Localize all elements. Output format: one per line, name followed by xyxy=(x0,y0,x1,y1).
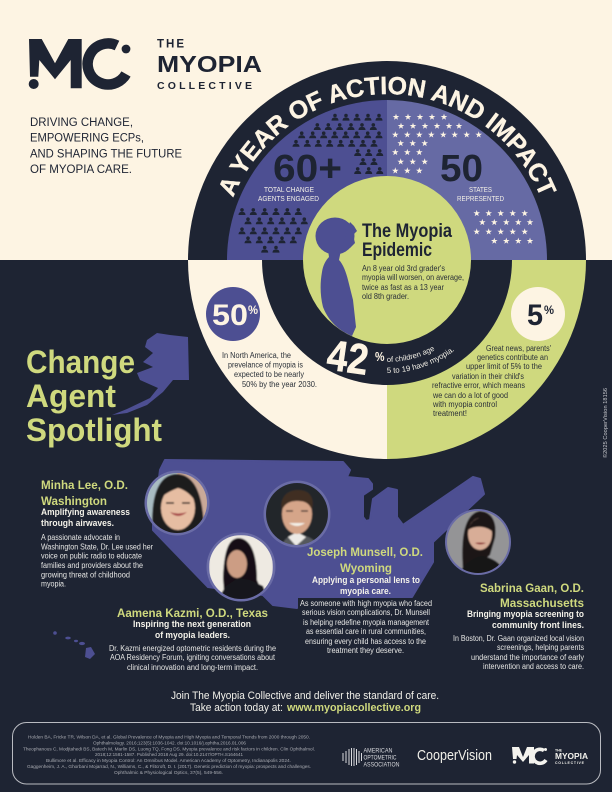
call to action xyxy=(171,690,439,714)
heading: The Myopia Epidemic xyxy=(362,221,452,261)
stat: 42 percent: % xyxy=(375,350,384,364)
text: genetics: Great news, parents' xyxy=(486,344,551,353)
panel: the myopia epidemic circle xyxy=(303,176,471,344)
logo: The Myopia Collective: MYOPIA xyxy=(157,51,262,77)
text block: Sabrina Gaan: screenings, helping parents xyxy=(497,643,584,652)
call to action: www.myopiacollective.org xyxy=(286,702,421,714)
logo: The Myopia Collective small: COLLECTIVE xyxy=(555,761,585,765)
text block: Minha Lee: Amplifying awareness xyxy=(41,507,130,518)
map: Hawaii xyxy=(53,631,95,659)
text: prevalence xyxy=(222,351,317,389)
page background bottom xyxy=(0,260,612,792)
tagline: AND SHAPING THE FUTURE xyxy=(30,146,182,160)
text block: Aamena Kazmi: clinical innovation and long-term impact. xyxy=(127,663,258,672)
references: Theophanous C, Modjtahedi BS, Batech M, Marlin DS, Luong TQ, Fong DS. Myopia prevalence and risk factors in children. Clin Ophthalmol. xyxy=(23,746,315,751)
heading: Change Agent Spotlight: Change xyxy=(26,344,135,380)
dark inner ring xyxy=(262,260,512,385)
text: genetics: we can do a lot of good xyxy=(432,391,508,400)
text: genetics: with myopia control xyxy=(432,400,497,409)
stat: 42 percent: 5 to 19 have myopia. xyxy=(387,349,454,373)
text: genetics: variation in their child's xyxy=(452,372,524,381)
references: Bullimore et al. Efficacy in Myopia Control: An Omnibus Model. American Academy of Optometry, Indianapolis 2024. xyxy=(46,758,291,763)
stat: 50 percent circle: % xyxy=(248,305,258,317)
references: Holden BA, Fricke TR, Wilson DA, et al. Global Prevalence of Myopia and High Myopia and Temporal Trends from 2000 through 2050. xyxy=(28,734,310,740)
text block: Sabrina Gaan: Sabrina Gaan, O.D. xyxy=(480,581,584,595)
logo: American Optometric Association: AMERICAN xyxy=(364,748,392,754)
semicircle: dark outer ring xyxy=(188,61,586,260)
text block: Joseph Munsell xyxy=(300,545,432,655)
text block: Joseph Munsell: Wyoming xyxy=(340,561,392,575)
text block: Joseph Munsell: is helping redefine myopia management xyxy=(303,618,430,627)
icon: child silhouette xyxy=(316,218,357,336)
text block: Sabrina Gaan: community front lines. xyxy=(492,620,584,631)
text block: Joseph Munsell: ensuring every child has access to the xyxy=(305,637,426,646)
stat: 5 percent circle: % xyxy=(544,305,554,317)
stat: 50 states: REPRESENTED xyxy=(457,194,504,203)
tagline: DRIVING CHANGE, xyxy=(30,115,133,129)
text block: Minha Lee xyxy=(41,478,153,589)
text block: Aamena Kazmi: AOA Residency Forum, igniting conversations about xyxy=(110,653,276,662)
text: prevalence: prevelance of myopia is xyxy=(228,360,303,370)
icons: stars upper group xyxy=(392,114,482,174)
text block: Sabrina Gaan: Bringing myopia screening to xyxy=(467,609,584,620)
text: genetics: genetics contribute an xyxy=(477,353,548,362)
panel: 50 percent quarter ring xyxy=(188,260,387,459)
logo: American Optometric Association xyxy=(343,748,400,768)
text block: Minha Lee: Minha Lee, O.D. xyxy=(41,478,128,492)
stat: 42 percent xyxy=(324,331,454,385)
text: epidemic description: An 8 year old 3rd grader's xyxy=(362,264,445,273)
stat: 50 percent circle: 50 xyxy=(212,299,248,332)
references: Ophthalmic & Physiological Optics, 37(5), 549-556. xyxy=(114,770,223,775)
text block: Joseph Munsell: Applying a personal lens to xyxy=(312,575,420,586)
icons: stars lower group xyxy=(473,210,533,244)
text block: Joseph Munsell: serious vision complications, Dr. Munsell xyxy=(302,608,430,617)
stat: 50 percent circle xyxy=(206,287,260,341)
stat: 60+ change agents: AGENTS ENGAGED xyxy=(258,194,319,203)
panel: 5 percent quarter ring xyxy=(387,260,586,459)
logo: The Myopia Collective small: THE xyxy=(555,748,563,752)
tagline: EMPOWERING ECPs, xyxy=(30,131,144,145)
stat: 60+ change agents: TOTAL CHANGE xyxy=(264,185,314,194)
map: continental United States xyxy=(153,460,484,608)
text block: Joseph Munsell: As someone with high myopia who faced xyxy=(300,599,432,608)
text block: Aamena Kazmi: Inspiring the next generation xyxy=(133,619,251,630)
text block: Joseph Munsell: Joseph Munsell, O.D. xyxy=(307,545,423,559)
text block: Aamena Kazmi: Aamena Kazmi, O.D., Texas xyxy=(117,606,268,620)
text block: Aamena Kazmi: of myopia leaders. xyxy=(155,630,230,641)
text block: Minha Lee: voice on public radio to educate xyxy=(41,552,142,561)
text: epidemic description xyxy=(362,264,464,301)
stat: 60+ change agents: 60+ xyxy=(273,148,342,190)
page background top xyxy=(0,0,612,260)
icons: people lower group xyxy=(238,208,308,253)
text: genetics xyxy=(432,344,551,418)
stat: 50 states: 50 xyxy=(440,148,483,190)
stat: 60+ change agents xyxy=(258,148,342,203)
text block: Minha Lee: growing threat of childhood xyxy=(41,570,130,579)
logo: The Myopia Collective small: MYOPIA xyxy=(555,752,588,761)
text block: Sabrina Gaan: Massachusetts xyxy=(500,596,584,610)
logo: American Optometric Association: OPTOMETRIC xyxy=(364,756,397,762)
references: Gaggenheim, J. A., Ghorbani Mojarrad, N., Williams, C., & Flitcroft, D. I. (2017). Genetic prediction of myopia: prospects and challenges. xyxy=(27,764,311,769)
heading: The Myopia Epidemic: The Myopia xyxy=(362,221,452,242)
arc title: A YEAR OF ACTION AND IMPACT xyxy=(220,76,557,198)
text: prevalence: expected to be nearly xyxy=(234,370,304,379)
portrait: Joseph Munsell xyxy=(264,480,330,548)
stat: 42 percent: 42 xyxy=(324,331,371,385)
text block: Aamena Kazmi: Dr. Kazmi energized optometric residents during the xyxy=(109,644,276,653)
heading: Change Agent Spotlight: Spotlight xyxy=(26,412,162,448)
text block: Minha Lee: Washington State, Dr. Lee used her xyxy=(41,542,153,551)
stat: 50 states: STATES xyxy=(469,185,492,194)
text: genetics: refractive error, which means xyxy=(432,381,525,390)
icons: people upper group xyxy=(292,114,383,174)
text: epidemic description: myopia will worsen, on average, xyxy=(362,273,464,282)
stat: 5 percent circle xyxy=(511,287,565,341)
text block: Minha Lee: families and providers about the xyxy=(41,561,143,570)
text: genetics: treatment! xyxy=(433,409,467,418)
call to action: Take action today at: xyxy=(190,702,283,714)
text block: Minha Lee: through airwaves. xyxy=(41,518,114,529)
references: 2018;12:1581-1587. Published 2018 Aug 29. doi:10.2147/OPTH.S164641 xyxy=(95,752,244,757)
text block: Sabrina Gaan: In Boston, Dr. Gaan organized local vision xyxy=(453,634,584,643)
logo: The Myopia Collective small xyxy=(512,747,588,765)
stat: 5 percent circle: 5 xyxy=(527,299,543,332)
panel: change agents xyxy=(227,100,387,260)
logo: The Myopia Collective xyxy=(29,38,262,92)
text block: Sabrina Gaan: intervention and access to care. xyxy=(483,662,584,671)
text block: Joseph Munsell: treatment they deserve. xyxy=(327,646,404,655)
text block: Joseph Munsell: as essential care in rural communities, xyxy=(306,627,426,636)
footer box xyxy=(12,722,600,784)
text block: Minha Lee: myopia. xyxy=(41,580,66,589)
text: epidemic description: old 8th grader. xyxy=(362,292,409,301)
tagline: OF MYOPIA CARE. xyxy=(30,162,132,176)
text block: Minha Lee: Washington xyxy=(41,494,107,508)
references xyxy=(23,734,315,775)
text block: Sabrina Gaan xyxy=(453,581,584,671)
stat: 50 states xyxy=(440,148,504,203)
heading: Change Agent Spotlight: Agent xyxy=(26,378,116,414)
logo: The Myopia Collective: COLLECTIVE xyxy=(157,80,252,92)
text: genetics: upper limit of 5% to the xyxy=(466,362,543,371)
text: prevalence: In North America, the xyxy=(222,351,291,360)
logo: CooperVision: CooperVision xyxy=(417,747,492,764)
call to action: Join The Myopia Collective and deliver the standard of care. xyxy=(171,690,439,702)
tagline xyxy=(30,115,182,176)
logo: American Optometric Association: ASSOCIATION xyxy=(364,762,400,768)
stat: 42 percent: of children age xyxy=(387,347,434,362)
text block: Joseph Munsell: myopia care. xyxy=(340,586,391,597)
heading: Change Agent Spotlight xyxy=(26,344,162,448)
text block: Aamena Kazmi xyxy=(109,606,276,672)
text: prevalence: 50% by the year 2030. xyxy=(242,380,317,389)
text block: Sabrina Gaan: understand the importance of early xyxy=(471,653,584,662)
logo: The Myopia Collective: THE xyxy=(157,38,184,50)
references: Ophthalmology. 2016;123(5):1036-1042. doi:10.1016/j.ophtha.2016.01.006 xyxy=(93,740,247,745)
text block: Minha Lee: A passionate advocate in xyxy=(41,533,120,542)
portrait: Minha Lee xyxy=(144,470,210,536)
portrait: Sabrina Gaan xyxy=(445,509,511,575)
portrait: Aamena Kazmi xyxy=(206,532,276,602)
text: epidemic description: twice as fast as a 13 year xyxy=(362,283,444,292)
map: Alaska xyxy=(112,333,189,415)
heading: The Myopia Epidemic: Epidemic xyxy=(362,240,432,261)
panel: states xyxy=(387,100,547,260)
copyright note: ©2025 CooperVision 18156 xyxy=(602,388,609,458)
